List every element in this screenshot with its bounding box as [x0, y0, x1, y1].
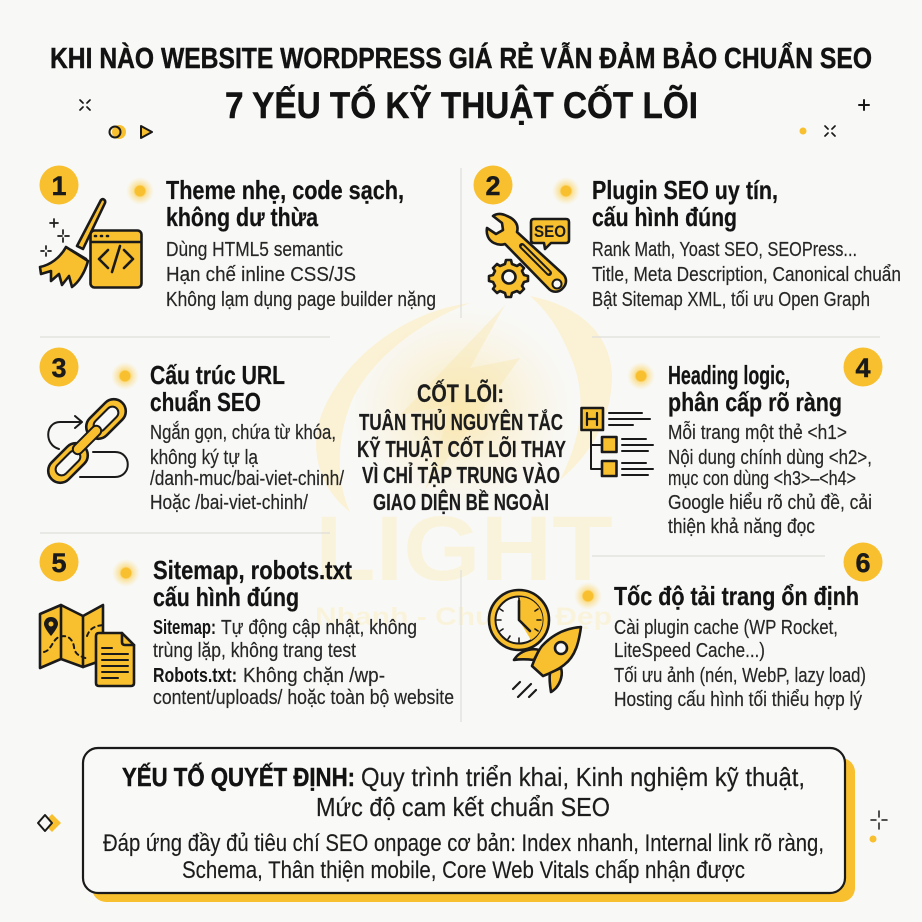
- glow dot: [111, 362, 139, 390]
- heading: chuẩn SEO: [150, 387, 261, 417]
- panel 3: URL: [40, 348, 344, 514]
- center callout: KỸ THUẬT CỐT LÕI THAY: [357, 435, 566, 462]
- body text: thiện khả năng đọc: [668, 516, 815, 538]
- center callout: CỐT LÕI:: [417, 378, 504, 408]
- heading: Plugin SEO uy tín,: [592, 175, 778, 205]
- panel 5: sitemap: [40, 542, 454, 709]
- body text: Hoặc /bai-viet-chinh/: [150, 492, 308, 514]
- body text: [614, 617, 866, 711]
- icon: chain link: [43, 394, 131, 488]
- bottom callout: [83, 748, 855, 902]
- body text: Robots.txt:: [153, 665, 237, 687]
- number badge 2: [474, 166, 512, 204]
- title: 7 YẾU TỐ KỸ THUẬT CỐT LÕI: [225, 84, 698, 126]
- number badge 5: [40, 542, 78, 582]
- body text: Bật Sitemap XML, tối ưu Open Graph: [592, 289, 870, 311]
- number badge 3: 3: [51, 353, 67, 383]
- body text: [592, 239, 901, 311]
- heading: cấu hình đúng: [153, 582, 299, 612]
- body text: [668, 421, 872, 538]
- panel 1: theme: [40, 166, 436, 311]
- heading: cấu hình đúng: [592, 202, 737, 232]
- callout box: [83, 748, 845, 893]
- icon: wrench, gear and SEO bubble: [487, 214, 569, 297]
- number badge 4: [844, 348, 882, 386]
- heading: Sitemap, robots.txt: [153, 555, 352, 585]
- heading: [592, 175, 778, 232]
- body text: Không lạm dụng page builder nặng: [166, 289, 436, 311]
- body text: content/uploads/ hoặc toàn bộ website: [153, 687, 454, 709]
- body text: Không chặn /wp-: [243, 665, 385, 687]
- glow dot: [574, 582, 602, 610]
- body text: Cài plugin cache (WP Rocket,: [614, 617, 838, 639]
- body text: Dùng HTML5 semantic: [166, 239, 343, 261]
- body text: không ký tự lạ: [150, 447, 259, 469]
- watermark logo: Nhanh - Chuẩn - Đẹp: [315, 603, 612, 631]
- body text: /danh-muc/bai-viet-chinh/: [150, 468, 344, 490]
- number badge 1: [40, 166, 78, 204]
- callout heading: [122, 762, 805, 822]
- body text: Sitemap:: [153, 617, 216, 639]
- heading: Tốc độ tải trang ổn định: [614, 581, 859, 611]
- body text: Tự động cập nhật, không: [221, 617, 417, 639]
- glow dot: [112, 559, 140, 587]
- callout heading: YẾU TỐ QUYẾT ĐỊNH:: [122, 762, 355, 792]
- callout heading: Quy trình triển khai, Kinh nghiệm kỹ thuật,: [361, 762, 805, 792]
- body text: Tối ưu ảnh (nén, WebP, lazy load): [614, 665, 866, 687]
- center callout: [357, 378, 566, 515]
- body text: mục con dùng <h3>–<h4>: [668, 468, 856, 490]
- body text: Hạn chế inline CSS/JS: [166, 264, 356, 286]
- body text: Hosting cấu hình tối thiểu hợp lý: [614, 689, 862, 711]
- callout body: [103, 830, 824, 884]
- heading: Cấu trúc URL: [150, 360, 285, 390]
- icon: heading hierarchy: [582, 408, 653, 476]
- center callout: TUÂN THỦ NGUYÊN TẮC: [359, 407, 563, 435]
- callout body: Schema, Thân thiện mobile, Core Web Vitals chấp nhận được: [182, 857, 745, 884]
- watermark logo: LIGHT: [315, 498, 613, 600]
- callout shadow: [92, 758, 855, 902]
- center callout: GIAO DIỆN BỀ NGOÀI: [373, 488, 549, 515]
- body text: Rank Math, Yoast SEO, SEOPress...: [592, 239, 857, 261]
- watermark logo: [315, 296, 613, 631]
- panel 2: plugin: [474, 166, 901, 311]
- callout heading: Mức độ cam kết chuẩn SEO: [316, 792, 610, 822]
- body text: Ngắn gọn, chứa từ khóa,: [150, 421, 336, 444]
- number badge 3: [40, 348, 78, 386]
- number badge 5: 5: [51, 548, 67, 578]
- decorative marks bottom: [38, 811, 887, 842]
- icon: wrench, gear and SEO bubble: SEO: [534, 222, 566, 241]
- body text: Google hiểu rõ chủ đề, cải: [668, 492, 872, 514]
- heading: phân cấp rõ ràng: [668, 387, 842, 417]
- panel 6: speed: [489, 542, 882, 711]
- number badge 1: 1: [51, 171, 67, 201]
- body text: [150, 421, 344, 514]
- dividers: [40, 168, 880, 722]
- number badge 6: [844, 542, 882, 582]
- panel 4: heading: [582, 348, 882, 538]
- glow dot: [627, 362, 655, 390]
- body text: LiteSpeed Cache...): [614, 640, 765, 662]
- number badge 6: 6: [855, 548, 871, 578]
- body text: Nội dung chính dùng <h2>,: [668, 447, 872, 469]
- body text: [166, 239, 436, 311]
- icon: clock and rocket: [489, 590, 581, 697]
- number badge 4: 4: [855, 353, 871, 383]
- decorative marks top: [80, 100, 869, 139]
- icon: map and document: [40, 605, 134, 686]
- heading: không dư thừa: [166, 202, 318, 232]
- heading: [150, 360, 285, 417]
- title: [50, 41, 872, 126]
- body text: Mỗi trang một thẻ <h1>: [668, 421, 847, 444]
- glow dot: [126, 177, 154, 205]
- heading: [668, 360, 842, 417]
- heading: [166, 175, 404, 232]
- body text: [153, 617, 454, 709]
- heading: [153, 555, 352, 612]
- heading: Theme nhẹ, code sạch,: [166, 175, 404, 205]
- glow dot: [552, 177, 580, 205]
- center callout: VÌ CHỈ TẬP TRUNG VÀO: [362, 460, 560, 488]
- number badge 2: 2: [485, 171, 501, 201]
- heading: Heading logic,: [668, 360, 790, 390]
- body text: trùng lặp, không trang test: [153, 640, 356, 662]
- icon: broom and code window: [40, 199, 142, 288]
